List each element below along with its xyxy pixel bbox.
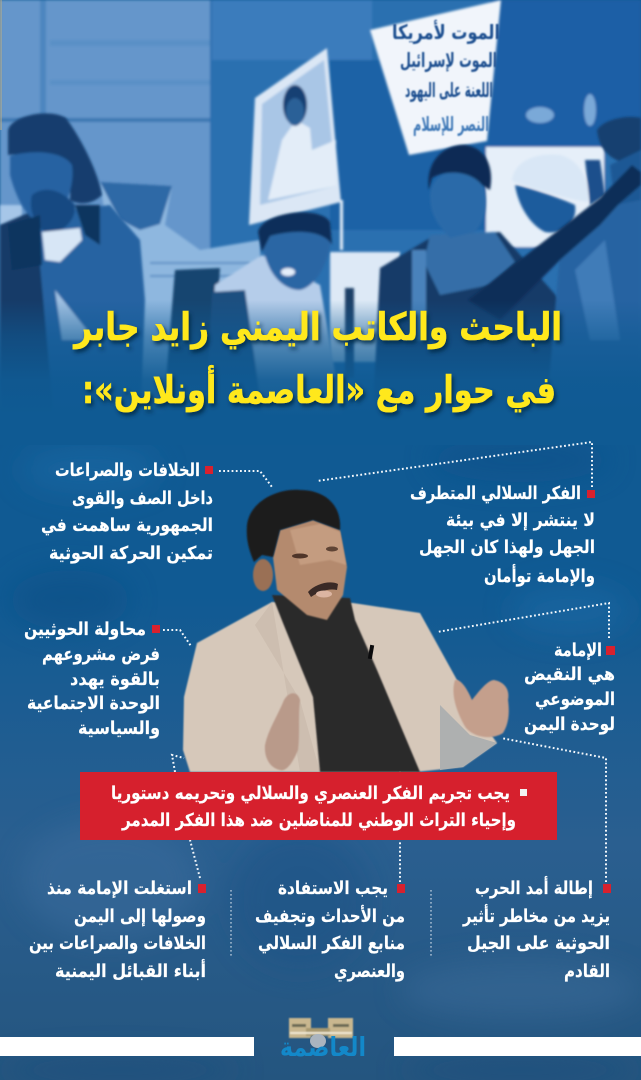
text block: prolonging the war: الحوثية على الجيل (467, 933, 610, 954)
text block: prolonging the war: القادم (564, 961, 610, 982)
text block: extremist ideology: الفكر السلالي المتطرف (410, 483, 581, 504)
text block: learning from events: من الأحداث وتجفيف (255, 905, 405, 927)
footer bar left (0, 1037, 254, 1056)
text block: imamate: هي النقيض (524, 664, 615, 685)
man in centre with white scarf (162, 212, 354, 430)
text block: imamate: لوحدة اليمن (524, 714, 615, 735)
man with turban, left (0, 113, 145, 430)
left hand (265, 693, 300, 770)
bullet (587, 490, 595, 498)
red callout: يجب تجريم الفكر العنصري والسلالي وتحريمه دستوريا (111, 783, 510, 804)
text block: factionalism: تمكين الحركة الحوثية (49, 543, 213, 564)
man with white turban (512, 154, 605, 233)
text block: Houthi attempt: بالقوة يهدد (70, 669, 160, 690)
face (273, 520, 347, 620)
photo: protesters background (0, 0, 641, 445)
bullet (397, 884, 405, 893)
text block: extremist ideology (410, 483, 595, 587)
red callout: وإحياء التراث الوطني للمناضلين ضد هذا الفكر المدمر (121, 810, 516, 831)
text block: imamate exploited: الخلافات والصراعات بين (29, 933, 206, 954)
poster with portrait (249, 48, 343, 250)
text block: extremist ideology: الجهل ولهذا كان الجهل (419, 537, 595, 558)
text block: Houthi attempt: محاولة الحوثيين (24, 619, 146, 640)
banner with slogan: النصر للإسلام (413, 112, 489, 136)
logo: wordmark: العاصمة (280, 1033, 366, 1063)
text block: Houthi attempt: الوحدة الاجتماعية (27, 693, 160, 714)
footer bar right (394, 1037, 641, 1056)
banner with slogan: الموت لإسرائيل (400, 48, 497, 72)
bullet (603, 884, 611, 893)
banner with slogan (370, 0, 501, 155)
dotted connector lines (163, 442, 609, 882)
text block: Houthi attempt: فرض مشروعهم (42, 644, 160, 665)
logo (280, 1018, 366, 1063)
text block: prolonging the war: إطالة أمد الحرب (475, 876, 593, 899)
microphone (368, 645, 374, 659)
banner with slogan: الموت لأمريكا (392, 19, 500, 44)
text block: extremist ideology: والإمامة توأمان (484, 564, 595, 587)
left-edge sliver (0, 0, 2, 130)
banner with slogan: اللعنة على اليهود (405, 78, 493, 102)
text block: imamate exploited: استغلت الإمامة منذ (47, 878, 192, 899)
bullet (198, 884, 206, 893)
hair (247, 490, 340, 562)
logo: grey emblem (310, 1034, 326, 1048)
portrait: interviewee (183, 490, 509, 772)
broken wall (0, 182, 400, 430)
text block: extremist ideology: لا ينتشر إلا في بيئة (446, 510, 595, 531)
text block: learning from events: والعنصري (334, 961, 405, 982)
white bullet (520, 789, 527, 796)
logo: golden building (289, 1018, 353, 1038)
photo backdrop (0, 0, 641, 430)
right hand (453, 680, 509, 737)
text block: imamate: الإمامة (554, 640, 602, 661)
vertical dotted dividers (231, 890, 431, 958)
young man with patterned scarf (372, 145, 560, 430)
text block: prolonging the war (462, 876, 611, 982)
bullet (606, 646, 615, 655)
text block: imamate (524, 640, 615, 735)
text block: prolonging the war: يزيد من مخاطر تأثير (462, 904, 610, 927)
text block: factionalism (41, 460, 213, 564)
moustache and mouth (308, 582, 338, 597)
text block: factionalism: الجمهورية ساهمت في (41, 515, 213, 536)
jacket (183, 602, 497, 772)
text block: imamate exploited: أبناء القبائل اليمنية (55, 959, 206, 982)
text block: Houthi attempt (24, 619, 160, 739)
soldier with rocket launcher, right (468, 117, 641, 430)
text block: imamate exploited: وصولها إلى اليمن (74, 906, 206, 927)
eyes (292, 554, 308, 558)
text block: learning from events: يجب الاستفادة (278, 878, 388, 899)
text block: learning from events: منابع الفكر السلالي (258, 933, 405, 954)
title (72, 305, 562, 413)
text block: factionalism: الخلافات والصراعات (55, 460, 200, 481)
background mottling (0, 438, 640, 1080)
ear (253, 559, 273, 591)
text block: imamate exploited (29, 878, 206, 982)
text block: imamate: الموضوعي (535, 689, 615, 710)
bullet (205, 466, 213, 474)
red callout (80, 772, 557, 840)
photo fade to blue (0, 300, 641, 445)
bullet (152, 625, 160, 633)
text block: learning from events (255, 878, 405, 982)
black shirt (272, 595, 420, 772)
text block: factionalism: داخل الصف والقوى (72, 488, 213, 509)
text block: Houthi attempt: والسياسية (78, 718, 160, 739)
